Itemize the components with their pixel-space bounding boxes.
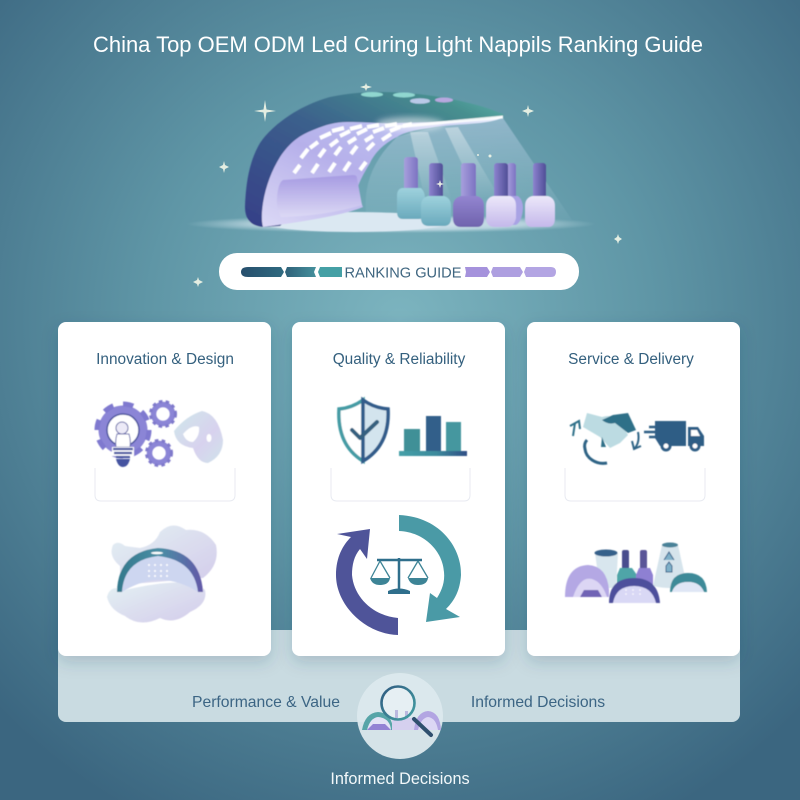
panel: service and delivery [527, 322, 740, 656]
label: informed decisions bottom: Informed Decisions [330, 770, 470, 788]
lamp window [277, 175, 362, 217]
light rays [410, 127, 498, 200]
ranking guide pill [219, 253, 579, 290]
heading: Service & Delivery [568, 351, 694, 368]
light strip glow [395, 117, 503, 127]
panel: innovation and design [58, 322, 271, 656]
panel: quality and reliability [292, 322, 505, 656]
lamp dome [245, 92, 503, 227]
bar chart icon [399, 416, 467, 456]
heading: Quality & Reliability [333, 351, 466, 368]
light cone [366, 118, 572, 220]
lamp inner arch [262, 116, 503, 227]
icon: balance scale [370, 558, 428, 594]
top buttons [361, 92, 453, 104]
empty caption box [565, 468, 705, 501]
bottom band [58, 630, 740, 722]
icon: cycle arrows [336, 515, 461, 635]
heading: Innovation & Design [96, 351, 234, 368]
title: China Top OEM ODM Led Curing Light Nappils Ranking Guide [93, 32, 703, 57]
icon: gear with lightbulb [97, 402, 223, 467]
progress segments left [241, 267, 284, 277]
sparkles [193, 83, 622, 287]
icon: delivery truck [644, 421, 704, 450]
empty caption box [95, 468, 235, 501]
nail polish bottles [397, 157, 555, 227]
empty caption box [331, 468, 470, 501]
icon: handshake with arrows [570, 413, 641, 463]
pill label: RANKING GUIDE [344, 266, 462, 282]
progress segments right [465, 267, 490, 277]
label: informed decisions right: Informed Decisions [471, 694, 605, 711]
icon: shield with check [339, 400, 388, 461]
blob [174, 411, 223, 463]
floor glow [186, 215, 596, 233]
label: performance and value: Performance & Value [192, 694, 340, 711]
floor bright area [260, 212, 450, 232]
icon: lamp on clouds [107, 525, 217, 623]
icon: magnifying glass over lamps [357, 673, 443, 759]
small gears [146, 402, 176, 466]
icon: lamp and bottle collection [565, 542, 707, 603]
illustration: LED curing lamp with nail polish bottles [186, 92, 596, 233]
LED strips [294, 124, 412, 173]
